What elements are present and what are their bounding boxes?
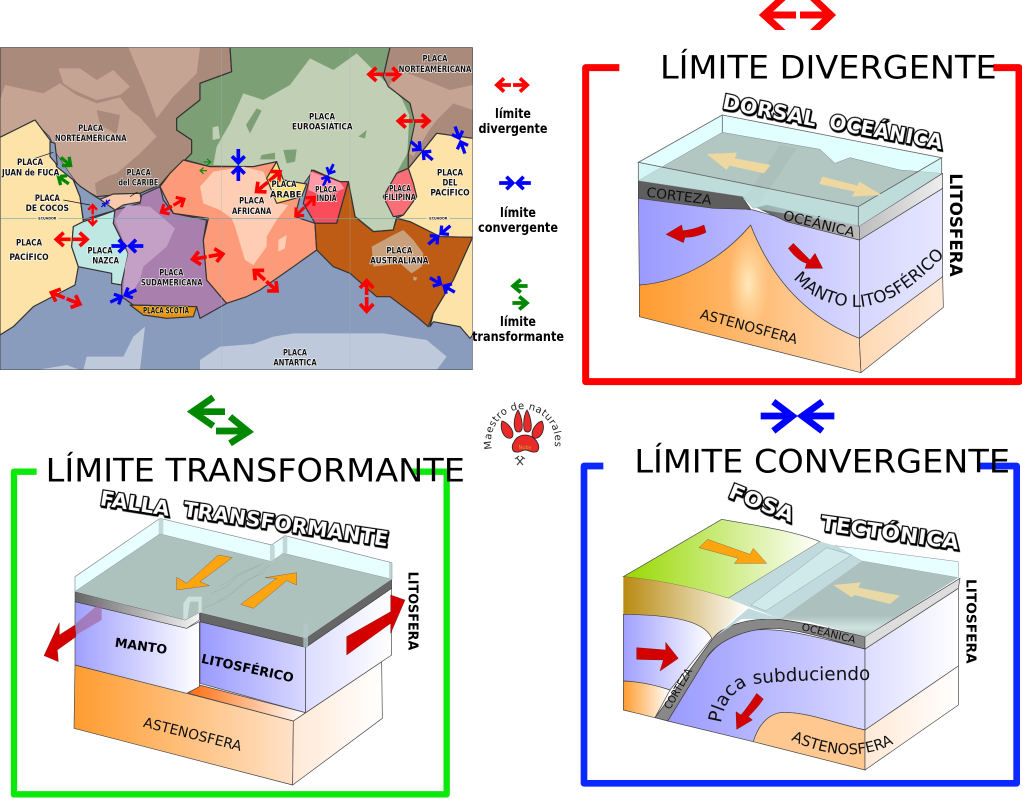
plate names: AUSTRALIANA (370, 256, 429, 266)
side label: LITOSFERA (404, 572, 420, 651)
plate names: DE COCOS (26, 204, 69, 214)
plate names: PLACA (239, 197, 264, 207)
side label: LITOSFERA (963, 579, 979, 664)
logo tools (515, 456, 525, 465)
plate: North American, east (383, 47, 473, 168)
heading: LÍMITE DIVERGENTE (660, 48, 997, 86)
plate names: PLACA (87, 246, 113, 256)
legend (472, 78, 564, 345)
logo pad mark: Nuby (518, 445, 532, 451)
plate: North American, west (0, 47, 232, 197)
title: fosa tectónica: FOSA (725, 479, 798, 527)
plate names: INDIA (317, 194, 337, 204)
paw (501, 410, 543, 452)
water surface (638, 115, 942, 226)
plate names: PACÍFICO (9, 251, 49, 263)
plate names: PLACA (389, 185, 411, 195)
plate names: EUROASIÁTICA (292, 120, 353, 132)
oceanic crust (638, 173, 943, 240)
continental mantle (623, 614, 712, 690)
plate names: DEL (442, 178, 458, 188)
translucent arrow part (76, 602, 102, 635)
block diagram: ASTENOSFERA (791, 732, 894, 754)
title: dorsal oceánica: OCEÁNICA (827, 109, 945, 154)
panel: divergent boundary (582, 0, 1022, 386)
transform arrows on the map (55, 153, 211, 188)
equator and meridians (0, 47, 473, 370)
plate: South American (113, 187, 227, 318)
trench (715, 542, 862, 637)
icon: divergent arrows (764, 0, 831, 33)
plate names: NORTEAMERICANA (399, 65, 471, 75)
sea floor (638, 132, 942, 226)
divergent arrows on the map (49, 68, 429, 311)
lithospheric mantle (638, 188, 943, 338)
plate: Caribbean (100, 193, 142, 210)
legend: transform: transformante (472, 330, 564, 345)
block diagram: Placa subduciendo (708, 666, 870, 722)
title: fosa tectónica: TECTÓNICA (819, 510, 961, 554)
legend: divergent: divergente (478, 122, 548, 137)
leader lines (35, 152, 137, 205)
continental surface (623, 519, 820, 598)
block diagram: ASTENOSFERA (142, 715, 244, 755)
logo: Maestro de Naturales paw (484, 402, 562, 466)
subducting mantle (668, 588, 958, 742)
title: falla transformante: TRANSFORMANTE (182, 497, 390, 551)
plate names (1, 55, 471, 369)
label: Ecuador: ECUADOR (38, 217, 57, 221)
plate names: PLACA (315, 186, 337, 196)
plate: Eurasian (177, 47, 415, 232)
plate: Juan de Fuca (50, 142, 57, 165)
plate: Philippine (383, 168, 417, 217)
layer labels: CORTEZA (646, 186, 712, 209)
plate names: del CARIBE (118, 178, 158, 188)
red arrows (637, 642, 763, 729)
sea floor (780, 561, 958, 637)
mantle flow arrows (666, 225, 823, 268)
convergent arrows on the map (100, 125, 470, 307)
water outline (638, 115, 942, 227)
asthenosphere (74, 662, 382, 785)
continental crust (623, 577, 748, 638)
panel: transform boundary (14, 397, 465, 794)
continental asthenosphere (623, 681, 670, 718)
plate names: NAZCA (92, 256, 119, 266)
frame (14, 472, 447, 794)
legend: convergent: convergente (478, 221, 558, 236)
plate names: PLACA (271, 180, 297, 190)
water front face (638, 158, 942, 226)
plate: Pacific, east (397, 133, 477, 338)
block diagram (44, 518, 405, 785)
title: dorsal oceánica: DORSAL (721, 90, 819, 131)
plate: African (160, 160, 317, 303)
icon: convergent arrows (761, 402, 834, 431)
heading: LÍMITE TRANSFORMANTE (46, 452, 465, 490)
plate names: AFRICANA (232, 207, 271, 217)
map border (0, 47, 473, 370)
plate names: PLACA (16, 238, 42, 248)
heading: LÍMITE CONVERGENTE (634, 442, 1010, 480)
frame (586, 68, 1019, 382)
frame (584, 466, 1017, 783)
water edge highlights (159, 518, 393, 647)
block diagram (637, 114, 944, 373)
title: dorsal oceánica (721, 90, 945, 154)
plate names: PLACA (386, 247, 412, 257)
legend: transform: límite (500, 315, 536, 330)
block diagram: CORTEZA (661, 665, 695, 711)
plate names: PLACA (78, 124, 103, 134)
legend: divergent: límite (495, 107, 531, 122)
sea floor (75, 534, 392, 638)
plate: Antarctic land (37, 327, 447, 370)
asthenosphere (753, 666, 958, 770)
block diagram (622, 519, 960, 770)
block diagram: ASTENOSFERA (698, 307, 799, 348)
title: falla transformante: FALLA (99, 486, 171, 521)
plate names: PACÍFICO (430, 186, 470, 198)
plate: Scotia (130, 305, 197, 318)
logo lettering: Maestro de naturales (484, 402, 562, 449)
plate names: PLACA (159, 268, 183, 278)
legend: convergent: límite (500, 206, 536, 221)
plate names: PLACA (35, 194, 60, 204)
fault squiggles (203, 563, 270, 608)
plate: India (303, 170, 348, 223)
panel: convergent boundary (580, 399, 1020, 787)
plate names: ANTÁRTICA (273, 357, 317, 369)
subducting crust (655, 578, 960, 721)
mantle: right block (200, 588, 392, 713)
plate: Cocos (73, 180, 117, 220)
label: Ecuador: ECUADOR (429, 217, 448, 221)
plate names: PLACA (283, 348, 307, 358)
panel: world map of tectonic plates (0, 47, 477, 370)
plate names: PLACA (437, 168, 463, 178)
side label: LITOSFERA (946, 173, 965, 277)
plate names: PLACA (309, 113, 335, 123)
plate: Arabian (267, 162, 307, 203)
block diagram: OCEÁNICA (781, 207, 857, 241)
block diagram: MANTO LITOSFÉRICO (794, 250, 942, 307)
block diagram: LITOSFÉRICO (200, 651, 295, 685)
plate names: ÁRABE (270, 189, 301, 201)
icon: transform arrows (193, 397, 248, 443)
legend: divergent (478, 78, 548, 137)
layer labels: OCEÁNICA (800, 620, 857, 646)
plate motion arrows (699, 539, 767, 563)
plate: Pacific, west (0, 120, 83, 335)
plate names: NORTEAMERICANA (55, 134, 127, 144)
plate names: PLACA (127, 168, 151, 178)
crust (75, 579, 392, 647)
title: falla transformante (99, 486, 390, 551)
pale arrow (833, 582, 900, 604)
plate motion arrows (177, 555, 297, 608)
plate names: JUAN de FUCA (1, 168, 59, 178)
plate motion arrows (707, 153, 882, 197)
water (835, 546, 958, 578)
mantle: left block (75, 602, 199, 693)
legend: convergent (478, 177, 558, 236)
plate names: PLACA (422, 55, 448, 65)
plate names: PLACA (17, 158, 43, 168)
plate: Australian (315, 182, 473, 327)
water (75, 518, 392, 592)
legend: transform (472, 280, 564, 345)
ridge shade (743, 145, 797, 203)
title: fosa tectónica (725, 479, 961, 554)
plate names: PLACA SCOTIA (143, 306, 189, 316)
label: Ecuador (38, 216, 448, 220)
plate names: SUDAMERICANA (141, 278, 203, 288)
asthenosphere (639, 225, 943, 373)
plate: Nazca (72, 210, 128, 285)
red arrows (44, 595, 405, 662)
layer labels: MANTO (114, 635, 168, 657)
plate names: FILIPINA (384, 193, 416, 203)
